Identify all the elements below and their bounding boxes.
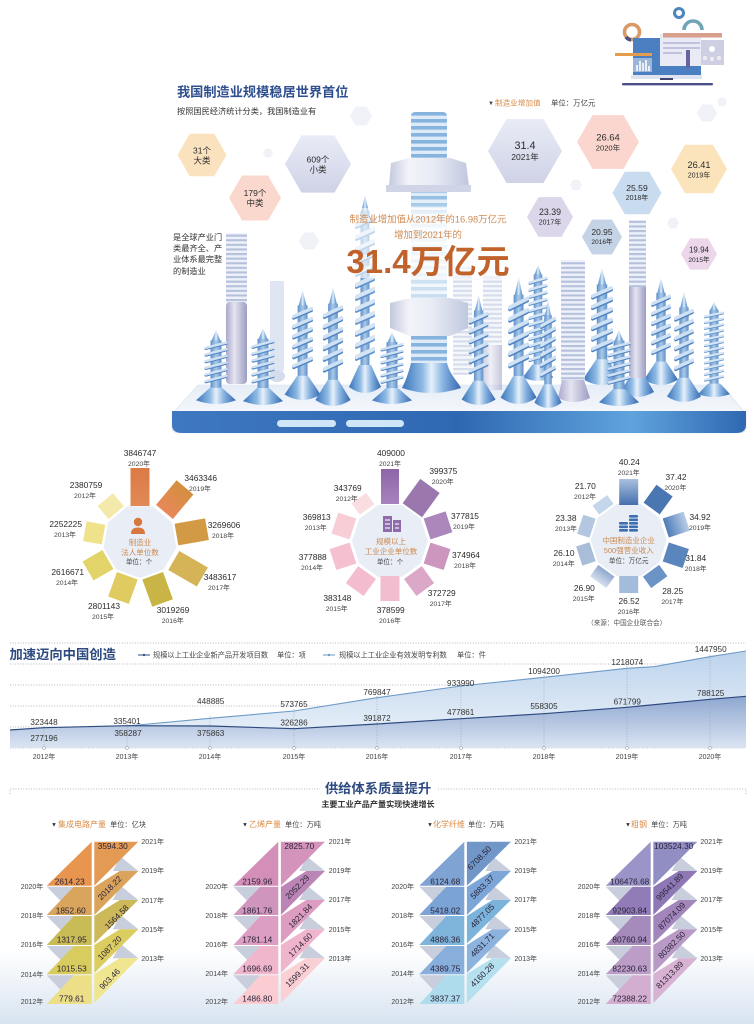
zigzag chart: chemical fibre: 单位：万吨 — [468, 820, 504, 829]
area line chart: 335401 — [113, 717, 141, 726]
right threaded bolts — [558, 220, 654, 402]
zigzag chart: crude steel: 72388.22 — [612, 994, 647, 1004]
zigzag chart: chemical fibre: 2019年 — [514, 866, 537, 875]
callout: value added headline — [340, 208, 516, 280]
zigzag chart: ethylene: 2052.29 — [283, 872, 312, 901]
radial chart: manufacturing legal entities: 2017年 — [208, 583, 230, 592]
radial chart: industrial enterprises above scale: 2015年 — [326, 604, 348, 613]
area line chart: 2018年 — [533, 752, 555, 761]
zigzag chart: ethylene: 2012年 — [205, 997, 228, 1006]
hexagons: value added by year: 25.59 — [626, 183, 648, 193]
area line chart: 1218074 — [611, 658, 644, 667]
radial chart: manufacturing legal entities: 2013年 — [54, 530, 76, 539]
area line chart: 671799 — [614, 698, 641, 706]
hexagons: value added by year — [488, 115, 727, 270]
radial chart: top 500 manufacturers revenue: 28.25 — [662, 586, 684, 596]
zigzag chart: integrated circuits: 2012年 — [21, 997, 43, 1006]
radial chart: top 500 manufacturers revenue: 2015年 — [573, 594, 595, 603]
zigzag chart: integrated circuits: 1087.20 — [95, 933, 124, 962]
radial chart: top 500 manufacturers revenue: 中国制造业企业 — [602, 535, 655, 545]
hexagons: value added by year: 31.4 — [514, 140, 536, 152]
legend: line series: 规模以上工业企业有效发明专利数 — [339, 650, 447, 660]
zigzag chart: chemical fibre: ▼ — [427, 822, 433, 828]
left note text: 类最齐全、产 — [173, 243, 222, 253]
radial chart: manufacturing legal entities: 2380759 — [70, 480, 103, 490]
area line chart: 769847 — [363, 688, 391, 697]
radial chart: industrial enterprises above scale: 2012年 — [336, 494, 358, 503]
zigzag chart: crude steel: 106476.68 — [610, 876, 650, 886]
zigzag chart: crude steel: 87074.09 — [656, 900, 688, 932]
hexagons: value added by year: 23.39 — [539, 207, 561, 217]
radial chart: top 500 manufacturers revenue: 2018年 — [685, 564, 707, 573]
zigzag chart: ethylene: 2159.96 — [242, 876, 273, 886]
zigzag chart: ethylene: 乙烯产量 — [249, 819, 281, 829]
radial chart: top 500 manufacturers revenue: 500强营业收入 — [604, 545, 654, 555]
area line chart: 2015年 — [283, 752, 305, 761]
area line chart: 326286 — [280, 718, 308, 728]
callout: value added headline: 制造业增加值从2012年的16.98万亿元 — [350, 214, 506, 224]
area line chart: 2020年 — [699, 752, 721, 761]
zigzag chart: crude steel: 80760.94 — [612, 934, 647, 944]
zigzag chart: crude steel: 2017年 — [700, 895, 723, 904]
radial chart: manufacturing legal entities: 2018年 — [212, 531, 234, 540]
heading: supply quality section: 供给体系质量提升 — [325, 780, 431, 796]
zigzag chart: crude steel: 99541.89 — [654, 871, 686, 903]
zigzag chart: crude steel: 81313.89 — [654, 959, 686, 991]
zigzag chart: crude steel: 2016年 — [578, 940, 600, 949]
zigzag chart: crude steel: 2015年 — [700, 925, 723, 934]
zigzag chart: ethylene: 2015年 — [329, 925, 351, 934]
area line chart: 573765 — [280, 700, 308, 709]
area line chart: 2014年 — [199, 752, 221, 761]
area line chart: 2017年 — [450, 752, 472, 761]
zigzag chart: crude steel: 92903.84 — [612, 906, 647, 916]
radial chart: industrial enterprises above scale: 374964 — [452, 550, 480, 560]
icon: buildings — [383, 516, 401, 532]
left threaded bolts — [226, 233, 285, 384]
zigzag chart: ethylene: 2017年 — [329, 895, 351, 904]
radial chart: manufacturing legal entities: 2801143 — [88, 601, 120, 611]
radial chart: top 500 manufacturers revenue: 2014年 — [553, 559, 575, 568]
radial chart: industrial enterprises above scale: 工业企业单位数 — [365, 546, 418, 556]
radial chart: manufacturing legal entities: 3463346 — [184, 473, 217, 483]
radial chart: industrial enterprises above scale: 2018年 — [454, 561, 476, 570]
radial chart: manufacturing legal entities: 2616671 — [51, 567, 84, 577]
area line chart: 448885 — [197, 697, 225, 706]
zigzag chart: chemical fibre: 4831.71 — [468, 930, 497, 959]
radial chart: top 500 manufacturers revenue: 2012年 — [574, 492, 596, 501]
radial chart: manufacturing legal entities: 2019年 — [189, 484, 211, 493]
decorative pale hexagons — [263, 98, 727, 250]
area line chart: 277196 — [30, 734, 58, 743]
area line chart: 1094200 — [528, 667, 560, 676]
zigzag chart: chemical fibre: 2020年 — [391, 882, 414, 891]
zigzag chart: integrated circuits: 3594.30 — [98, 841, 128, 851]
zigzag chart: ethylene: 2013年 — [329, 954, 351, 963]
hexagons: value added by year: 2021年 — [511, 152, 539, 162]
hexagons: industry categories: 大类 — [193, 156, 211, 166]
radial chart: top 500 manufacturers revenue: 26.10 — [554, 548, 575, 558]
radial chart: industrial enterprises above scale: 2016年 — [379, 616, 401, 625]
zigzag chart: crude steel — [578, 819, 723, 1006]
zigzag chart: ethylene: 1821.84 — [286, 901, 315, 930]
radial chart: top 500 manufacturers revenue: 23.38 — [556, 513, 577, 523]
zigzag chart: crude steel: 单位：万吨 — [651, 820, 687, 829]
radial chart: top 500 manufacturers revenue: 26.52 — [619, 596, 640, 606]
radial chart: industrial enterprises above scale: 378599 — [377, 605, 405, 615]
zigzag chart: integrated circuits: 1015.53 — [57, 964, 87, 974]
hexagons: value added by year: 2019年 — [688, 170, 710, 180]
zigzag chart: chemical fibre: 2017年 — [514, 895, 537, 904]
zigzag chart: integrated circuits: 集成电路产量 — [58, 819, 106, 829]
zigzag chart: ethylene: 2021年 — [329, 837, 351, 846]
zigzag chart: crude steel: 80382.50 — [656, 929, 688, 961]
area line chart: 558305 — [530, 702, 558, 711]
zigzag chart: ethylene: 2018年 — [205, 911, 228, 920]
hexagons: value added by year: 26.64 — [596, 132, 620, 142]
hexagons: value added by year: 2018年 — [626, 193, 648, 202]
zigzag chart: integrated circuits: 单位：亿块 — [110, 820, 146, 829]
area line chart: 375863 — [197, 729, 225, 738]
radial chart: industrial enterprises above scale: 2017年 — [430, 599, 452, 608]
radial chart: industrial enterprises above scale: 383148 — [323, 593, 352, 603]
zigzag chart: chemical fibre: 2014年 — [391, 969, 414, 978]
radial chart: manufacturing legal entities: 3269606 — [208, 520, 241, 530]
zigzag chart: integrated circuits: 903.46 — [97, 966, 122, 991]
zigzag chart: chemical fibre: 2015年 — [514, 925, 537, 934]
big central bolt — [386, 112, 471, 393]
source note: （来源：中国企业联合会） — [587, 618, 666, 627]
zigzag chart: ethylene: 2825.70 — [284, 841, 315, 851]
hexagons: value added by year: 19.94 — [689, 246, 710, 254]
radial chart: industrial enterprises above scale: 377888 — [299, 552, 327, 562]
zigzag chart: integrated circuits: 2013年 — [141, 954, 164, 963]
radial chart: top 500 manufacturers revenue: 2013年 — [555, 524, 577, 533]
zigzag chart: chemical fibre: 6708.50 — [465, 843, 494, 872]
legend: line series — [138, 650, 486, 660]
area line chart: 323448 — [30, 718, 58, 727]
radial chart: top 500 manufacturers revenue: 37.42 — [666, 472, 687, 482]
zigzag chart: ethylene: 1861.76 — [242, 906, 273, 916]
page bottom background gradient — [0, 950, 754, 1024]
radial chart: industrial enterprises above scale: 规模以上 — [376, 536, 406, 546]
radial chart: industrial enterprises above scale: 2014年 — [301, 563, 323, 572]
area line chart: 477861 — [447, 708, 475, 717]
screws at the back — [349, 195, 381, 393]
zigzag chart: crude steel: 2019年 — [700, 866, 723, 875]
zigzag chart: crude steel: 2012年 — [578, 997, 600, 1006]
zigzag chart: integrated circuits: 1317.95 — [57, 934, 87, 944]
value added legend: ▼ — [488, 101, 494, 107]
intro text: 按照国民经济统计分类，我国制造业有 — [177, 106, 316, 116]
radial chart: industrial enterprises above scale: 2013年 — [305, 523, 327, 532]
value added legend: 单位：万亿元 — [551, 98, 596, 108]
zigzag chart: chemical fibre: 2018年 — [391, 911, 414, 920]
radial chart: industrial enterprises above scale: 377815 — [451, 511, 479, 521]
radial chart: top 500 manufacturers revenue: 21.70 — [575, 481, 596, 491]
hexagons: value added by year: 2016年 — [591, 237, 613, 246]
zigzag chart: ethylene: 1486.80 — [242, 994, 273, 1004]
radial chart: top 500 manufacturers revenue: 单位：万亿元 — [609, 556, 649, 565]
zigzag chart: ethylene — [205, 819, 351, 1006]
title: 我国制造业规模稳居世界首位 — [177, 84, 348, 100]
zigzag chart: integrated circuits: ▼ — [51, 822, 57, 828]
zigzag chart: integrated circuits: 2014年 — [21, 970, 43, 979]
zigzag chart: chemical fibre: 4877.05 — [468, 901, 497, 930]
bolts and screws row — [196, 112, 730, 408]
radial chart: top 500 manufacturers revenue: 2020年 — [664, 483, 686, 492]
area line chart: 1447950 — [695, 645, 727, 654]
zigzag chart: chemical fibre: 4389.75 — [430, 964, 461, 974]
zigzag chart: crude steel: 2020年 — [578, 882, 600, 891]
zigzag chart: chemical fibre: 2021年 — [514, 837, 537, 846]
hexagons: value added by year: 20.95 — [592, 227, 613, 237]
zigzag chart: chemical fibre — [391, 819, 537, 1006]
area line chart: 2019年 — [616, 752, 638, 761]
zigzag chart: crude steel: 2018年 — [578, 911, 600, 920]
radial chart: top 500 manufacturers revenue: 31.84 — [685, 553, 707, 563]
radial chart: industrial enterprises above scale — [299, 448, 480, 625]
zigzag chart: ethylene: 1781.14 — [242, 934, 273, 944]
platform base — [172, 385, 746, 433]
icon: person — [131, 518, 145, 534]
zigzag chart: integrated circuits: 2020年 — [21, 882, 43, 891]
legend: line series: 规模以上工业企业新产品开发项目数 — [153, 650, 268, 660]
radial chart: industrial enterprises above scale: 372729 — [428, 588, 456, 598]
legend: line series: 单位：项 — [277, 650, 306, 660]
zigzag chart: integrated circuits: 2019年 — [141, 866, 164, 875]
zigzag chart: ethylene: 2014年 — [205, 969, 228, 978]
zigzag chart: crude steel: ▼ — [625, 822, 631, 828]
radial chart: industrial enterprises above scale: 409000 — [377, 448, 405, 458]
zigzag chart: chemical fibre: 5418.02 — [430, 906, 461, 916]
zigzag chart: integrated circuits: 1852.60 — [56, 906, 86, 916]
zigzag chart: ethylene: 2019年 — [329, 866, 351, 875]
radial chart: top 500 manufacturers revenue: 2019年 — [689, 523, 711, 532]
radial chart: industrial enterprises above scale: 2020年 — [432, 477, 454, 486]
callout: value added headline: 增加到2021年的 — [394, 229, 462, 240]
radial chart: manufacturing legal entities: 3019269 — [157, 605, 190, 615]
radial chart: manufacturing legal entities: 2016年 — [162, 616, 184, 625]
zigzag chart: chemical fibre: 2013年 — [514, 954, 537, 963]
radial chart: manufacturing legal entities: 2012年 — [74, 491, 96, 500]
hexagons: value added by year: 2017年 — [539, 218, 561, 226]
hexagons: industry categories: 609个 — [307, 154, 330, 164]
zigzag chart: ethylene: 1714.60 — [286, 930, 315, 959]
zigzag chart: ethylene: 1696.69 — [242, 964, 273, 974]
zigzag chart: integrated circuits: 2015年 — [141, 925, 164, 934]
zigzag chart: integrated circuits: 2018年 — [21, 911, 43, 920]
hexagons: industry categories: 中类 — [246, 198, 264, 208]
radial chart: top 500 manufacturers revenue: 2021年 — [618, 468, 640, 477]
zigzag chart: integrated circuits: 2021年 — [141, 837, 164, 846]
zigzag chart: chemical fibre: 2016年 — [391, 940, 414, 949]
heading: supply quality section — [10, 780, 746, 809]
zigzag chart: chemical fibre: 4160.28 — [468, 960, 497, 989]
zigzag chart: integrated circuits: 2614.23 — [55, 876, 85, 886]
left note text — [173, 232, 222, 276]
zigzag chart: integrated circuits: 2017年 — [141, 896, 164, 905]
zigzag chart: crude steel: 2021年 — [700, 837, 723, 846]
left note text: 是全球产业门 — [173, 232, 222, 242]
legend: line series: 单位：件 — [457, 650, 486, 660]
icon: coin stacks — [619, 515, 638, 532]
radial chart: manufacturing legal entities: 3846747 — [124, 448, 157, 458]
value added legend: 制造业增加值 — [495, 98, 541, 108]
radial chart: manufacturing legal entities: 3483617 — [204, 572, 237, 582]
area line chart: 2013年 — [116, 752, 138, 761]
zigzag chart: integrated circuits: 1564.58 — [102, 902, 131, 931]
area line chart: 391872 — [363, 714, 391, 723]
zigzag chart: crude steel: 2014年 — [578, 969, 600, 978]
hexagons: value added by year: 2020年 — [596, 142, 621, 152]
area line chart: 2012年 — [33, 752, 55, 761]
radial chart: top 500 manufacturers revenue: 40.24 — [619, 457, 640, 467]
radial chart: manufacturing legal entities: 制造业 — [129, 537, 152, 547]
radial chart: manufacturing legal entities: 2014年 — [56, 578, 78, 587]
zigzag chart: chemical fibre: 6124.68 — [430, 876, 461, 886]
radial chart: manufacturing legal entities — [49, 448, 241, 625]
zigzag chart: chemical fibre: 3837.37 — [430, 994, 461, 1004]
radial chart: top 500 manufacturers revenue: 26.90 — [574, 583, 595, 593]
radial chart: top 500 manufacturers revenue: 2017年 — [661, 597, 683, 606]
zigzag chart: ethylene: 1599.31 — [283, 960, 312, 989]
area line chart: 788125 — [697, 689, 725, 698]
zigzag chart: ethylene: ▼ — [242, 822, 248, 828]
area line chart: 358287 — [114, 729, 142, 738]
radial chart: industrial enterprises above scale: 单位：个 — [377, 557, 404, 566]
area line chart: 933990 — [447, 679, 475, 688]
zigzag chart: ethylene: 2016年 — [205, 940, 228, 949]
value added legend — [488, 98, 596, 108]
callout: value added headline: 31.4万亿元 — [346, 243, 510, 280]
zigzag chart: chemical fibre: 5883.37 — [468, 872, 497, 901]
left note text: 的制造业 — [173, 266, 206, 276]
zigzag chart: crude steel: 粗钢 — [631, 819, 647, 829]
zigzag chart: crude steel: 2013年 — [700, 954, 723, 963]
hexagons: value added by year: 2015年 — [688, 255, 710, 264]
radial chart: top 500 manufacturers revenue — [553, 457, 711, 627]
zigzag chart: chemical fibre: 化学纤维 — [433, 819, 465, 829]
zigzag chart: integrated circuits — [21, 819, 164, 1006]
zigzag chart: integrated circuits: 2016年 — [21, 940, 43, 949]
icon: laptop with gears and charts — [615, 8, 724, 85]
area line chart: 2016年 — [366, 752, 388, 761]
left note text: 业体系最完整 — [173, 254, 222, 264]
radial chart: manufacturing legal entities: 2015年 — [92, 612, 114, 621]
radial chart: top 500 manufacturers revenue: 34.92 — [690, 512, 711, 522]
hexagons: industry categories: 179个 — [244, 188, 267, 198]
radial chart: top 500 manufacturers revenue: 2016年 — [618, 607, 640, 616]
zigzag chart: integrated circuits: 2018.22 — [95, 873, 124, 902]
zigzag chart: ethylene: 单位：万吨 — [285, 820, 321, 829]
zigzag chart: crude steel: 103524.30 — [654, 841, 694, 851]
radial chart: industrial enterprises above scale: 343769 — [334, 483, 362, 493]
radial chart: industrial enterprises above scale: 2021年 — [379, 459, 401, 468]
radial chart: manufacturing legal entities: 2252225 — [49, 519, 82, 529]
pale background bolts — [453, 265, 502, 390]
hexagons: value added by year: 26.41 — [688, 160, 710, 170]
screws at the front — [196, 330, 236, 404]
area line chart — [10, 643, 746, 761]
hexagons: industry categories: 小类 — [309, 164, 327, 174]
zigzag chart: crude steel: 82230.63 — [612, 964, 647, 974]
radial chart: manufacturing legal entities: 2020年 — [128, 459, 150, 468]
heading: supply quality section: 主要工业产品产量实现快速增长 — [321, 799, 435, 809]
hexagons: industry categories — [178, 134, 351, 221]
zigzag chart: integrated circuits: 779.61 — [59, 994, 85, 1004]
radial chart: industrial enterprises above scale: 369813 — [303, 512, 331, 522]
heading: innovation section: 加速迈向中国创造 — [10, 646, 117, 662]
radial chart: industrial enterprises above scale: 399375 — [429, 466, 458, 476]
zigzag chart: chemical fibre: 2012年 — [391, 997, 414, 1006]
zigzag chart: chemical fibre: 4886.36 — [430, 934, 461, 944]
hexagons: industry categories: 31个 — [193, 146, 211, 156]
radial chart: manufacturing legal entities: 法人单位数 — [121, 547, 159, 557]
radial chart: industrial enterprises above scale: 2019年 — [453, 522, 475, 531]
radial chart: manufacturing legal entities: 单位：个 — [126, 557, 153, 566]
zigzag chart: ethylene: 2020年 — [205, 882, 228, 891]
